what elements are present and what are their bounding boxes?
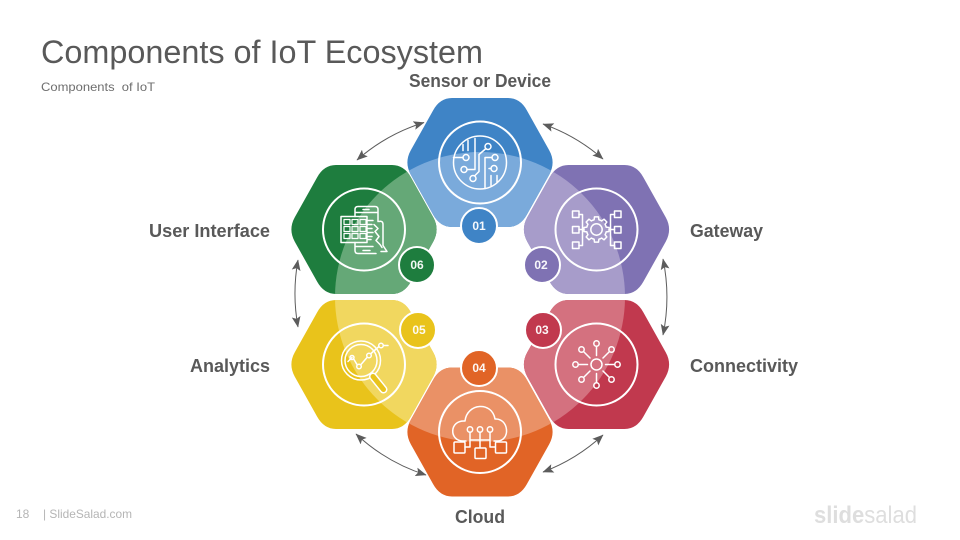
badge 06: 06 — [410, 258, 424, 272]
subtitle: Components of IoT — [41, 80, 156, 94]
icon: magnifier with trend line — [342, 341, 388, 390]
badge 02: 02 — [534, 258, 548, 272]
badge 05 — [400, 312, 436, 348]
badge 04: 04 — [472, 361, 486, 375]
label: Sensor or Device: Sensor or Device — [409, 71, 551, 91]
icon: cloud network — [453, 406, 507, 458]
segment 6: User Interface hexagon — [291, 165, 437, 294]
badge 06 — [399, 247, 435, 283]
label: Connectivity: Connectivity — [690, 356, 798, 376]
badge 03 — [525, 312, 561, 348]
badge 05: 05 — [412, 323, 426, 337]
segment 4: Cloud hexagon — [407, 368, 553, 496]
arrows between segments — [295, 122, 667, 475]
label: Analytics: Analytics — [190, 356, 270, 376]
footer: page number: 18 — [16, 507, 30, 521]
icon: connected network hub — [573, 341, 620, 388]
footer: logo wordmark: slidesalad — [814, 502, 917, 529]
segment 1: Sensor or Device hexagon — [407, 98, 553, 227]
icon: gear with nodes — [572, 211, 621, 248]
segment 2: Gateway hexagon — [524, 165, 670, 294]
icon: circuit chip — [454, 136, 506, 189]
segment 3: Connectivity hexagon — [524, 300, 670, 429]
icon: mobile interface with hand — [341, 206, 387, 254]
segment 5: Analytics hexagon — [291, 300, 437, 429]
title: Components of IoT Ecosystem — [41, 34, 483, 70]
badge 01 — [461, 208, 497, 244]
label: Gateway: Gateway — [690, 221, 763, 241]
badge 02 — [524, 247, 560, 283]
badge 03: 03 — [535, 323, 549, 337]
badge 01: 01 — [472, 219, 486, 233]
footer: site name: | SlideSalad.com — [43, 507, 132, 521]
label: User Interface: User Interface — [149, 221, 270, 241]
label: Cloud: Cloud — [455, 507, 505, 527]
badge 04 — [461, 350, 497, 386]
